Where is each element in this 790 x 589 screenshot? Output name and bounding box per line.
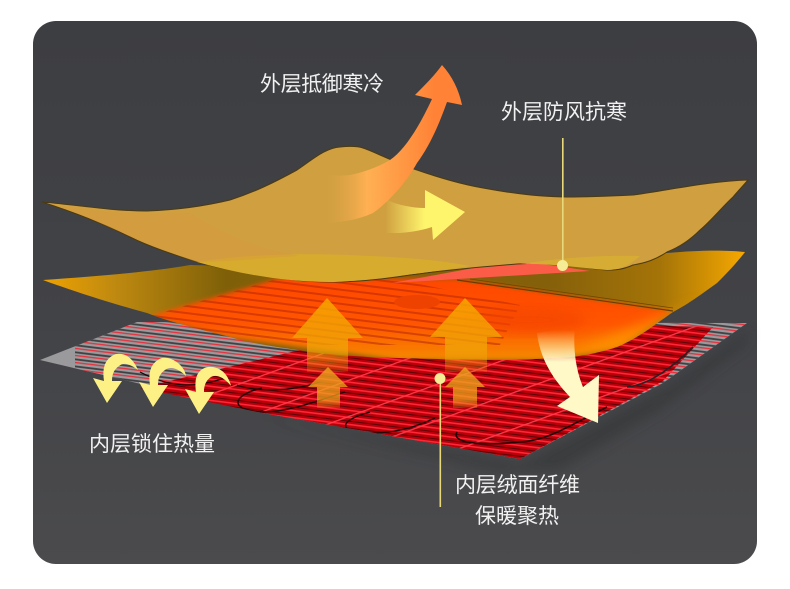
arrow: small up arrow right (445, 367, 485, 408)
seam line (457, 280, 673, 311)
arrow: yellow deflected arrow (385, 190, 465, 240)
heating wire grid (140, 326, 713, 459)
pink strip (392, 264, 590, 283)
stripes (150, 275, 520, 345)
leader line: outer layer (557, 138, 568, 271)
panel: top golden layer (42, 146, 748, 282)
panel: middle orange layer (43, 251, 745, 360)
amber right rim (576, 306, 682, 356)
arrow: curved yellow arrow 2 (139, 358, 186, 407)
label: warmth and heat gathering: 保暖聚热 (475, 505, 559, 528)
red hot spots (394, 295, 440, 309)
left grey wire loop (140, 372, 225, 385)
left orange tint (60, 206, 300, 262)
label: inner fleece fibre: 内层绒面纤维 (455, 474, 580, 497)
label: outer layer resists cold: 外层抵御寒冷 (260, 73, 384, 96)
leader line: inner layer (434, 373, 446, 507)
arrow: small up arrow left (308, 367, 348, 408)
arrow: orange rising arrow (323, 65, 462, 223)
label: inner layer locks heat: 内层锁住热量 (89, 433, 215, 456)
plate grey base (40, 322, 747, 459)
lighter lower band (197, 254, 470, 282)
plate grey stripes (75, 322, 746, 459)
plate red area (140, 320, 713, 459)
right lower band (520, 256, 640, 270)
panel: bottom heating plate layer (40, 322, 747, 469)
arrow: large up arrow right (430, 298, 502, 372)
arrow: curved yellow arrow 3 (185, 367, 231, 414)
plate shadow (263, 330, 750, 472)
label: outer layer windproof: 外层防风抗寒 (501, 101, 627, 124)
orange glow region (150, 278, 672, 360)
arrow: curved yellow arrow 1 (93, 354, 138, 403)
arrow: large up arrow left (292, 298, 363, 372)
arrow: white down arrow (537, 327, 599, 423)
